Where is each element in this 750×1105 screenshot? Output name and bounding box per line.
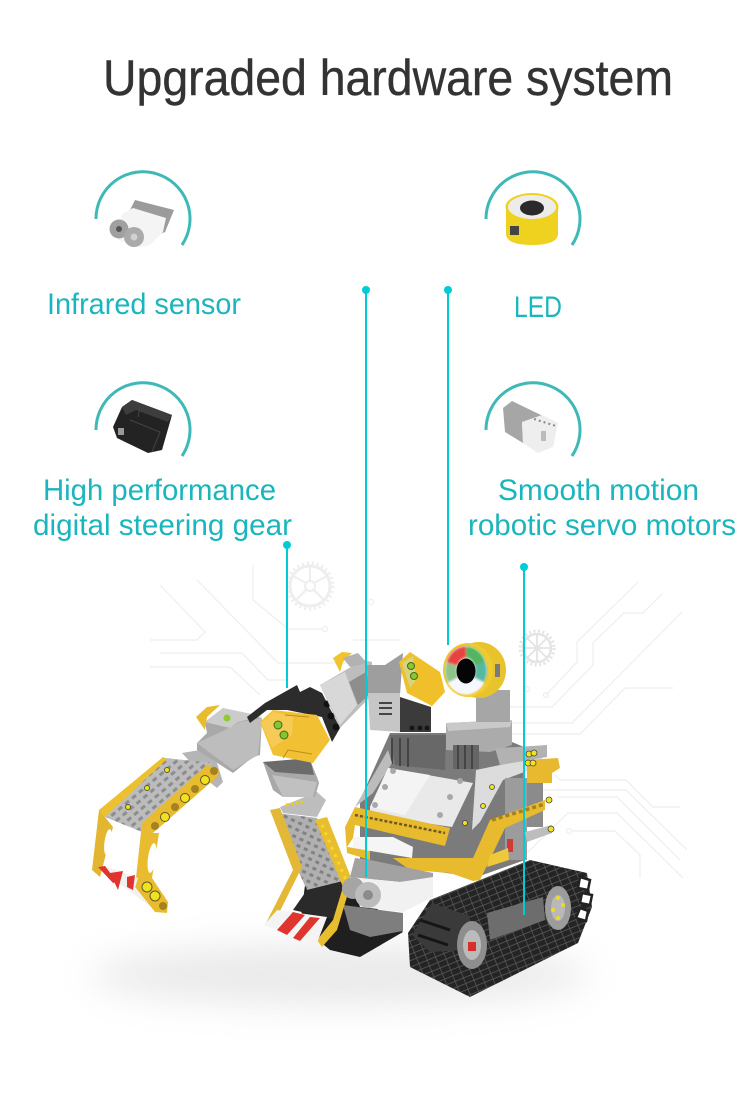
label: infrared sensor: Infrared sensor (47, 288, 241, 321)
label: LED: LED (514, 291, 562, 324)
robot: right claw (264, 792, 352, 947)
gear: right (520, 631, 554, 665)
robot floor shadow (90, 945, 590, 1005)
label: high performance digital steering gear (33, 474, 292, 542)
label: smooth motion robotic servo motors: Smooth motion (498, 474, 699, 507)
body: side beam (462, 745, 560, 860)
icon: infrared sensor (96, 172, 190, 247)
label: smooth motion robotic servo motors (468, 474, 736, 542)
icon: LED module (486, 172, 580, 245)
body: yellow front bars (345, 800, 545, 881)
robot: body (342, 720, 560, 912)
leader line: servo motors (520, 563, 528, 915)
icon: digital steering gear (96, 383, 190, 456)
robot: left claw (92, 750, 223, 913)
robot: yellow head hex plate (399, 652, 445, 706)
leader line: infrared sensor (362, 286, 370, 877)
body: white front plate (370, 768, 473, 827)
robot: track assembly (408, 860, 592, 997)
robot: arm wrist link (263, 758, 319, 797)
robot: neck and arm servo (367, 653, 431, 732)
robot: arm gray joint (196, 705, 262, 773)
robot: left dark base track (300, 880, 403, 957)
leader line: LED (444, 286, 452, 645)
title: Upgraded hardware system (103, 50, 673, 106)
track: rear wheel (545, 886, 571, 930)
leader line: steering gear (283, 541, 291, 688)
background: circuit pattern (150, 563, 687, 878)
robot: LED neck (476, 690, 510, 722)
gear: left (287, 563, 333, 609)
track: front wheel (457, 921, 487, 969)
robot: upper arm (320, 652, 372, 728)
icon: servo motor (486, 383, 580, 456)
robot (92, 642, 592, 997)
robot: black servo on arm (247, 685, 340, 742)
label: smooth motion robotic servo motors: robotic servo motors (468, 509, 736, 542)
label: high performance digital steering gear: digital steering gear (33, 509, 292, 542)
robot: yellow arm hex plate (260, 710, 330, 763)
body: white infrared sensor on chassis (342, 858, 433, 912)
robot: LED eye (443, 642, 506, 698)
label: high performance digital steering gear: High performance (43, 474, 276, 507)
